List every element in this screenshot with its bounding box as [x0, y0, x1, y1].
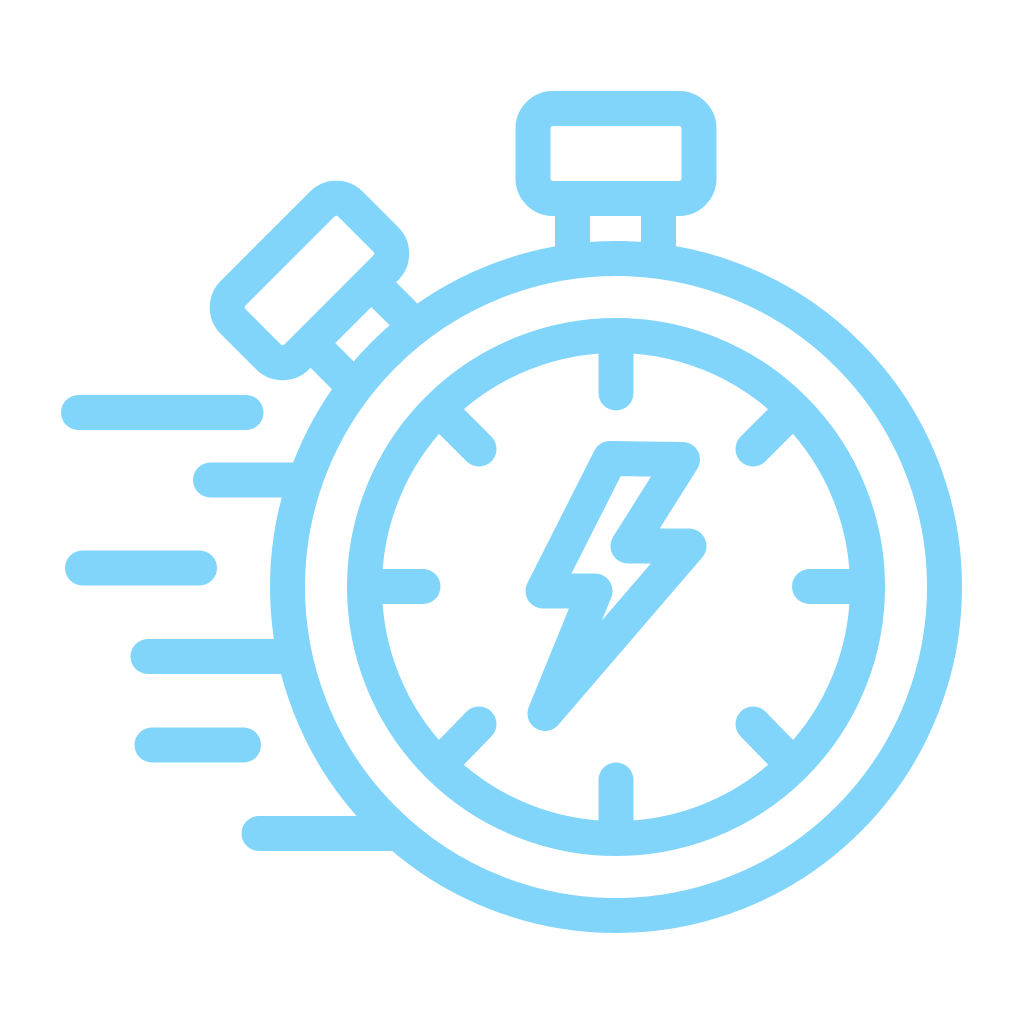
dial tick marks: [374, 345, 858, 829]
speed lines: [78, 412, 390, 834]
top crown button: [533, 108, 699, 250]
lightning bolt: [543, 458, 689, 714]
inner dial ring: [364, 336, 868, 838]
stopwatch drawing: [78, 108, 944, 916]
outer ring: [288, 258, 944, 916]
side button: [219, 190, 436, 407]
